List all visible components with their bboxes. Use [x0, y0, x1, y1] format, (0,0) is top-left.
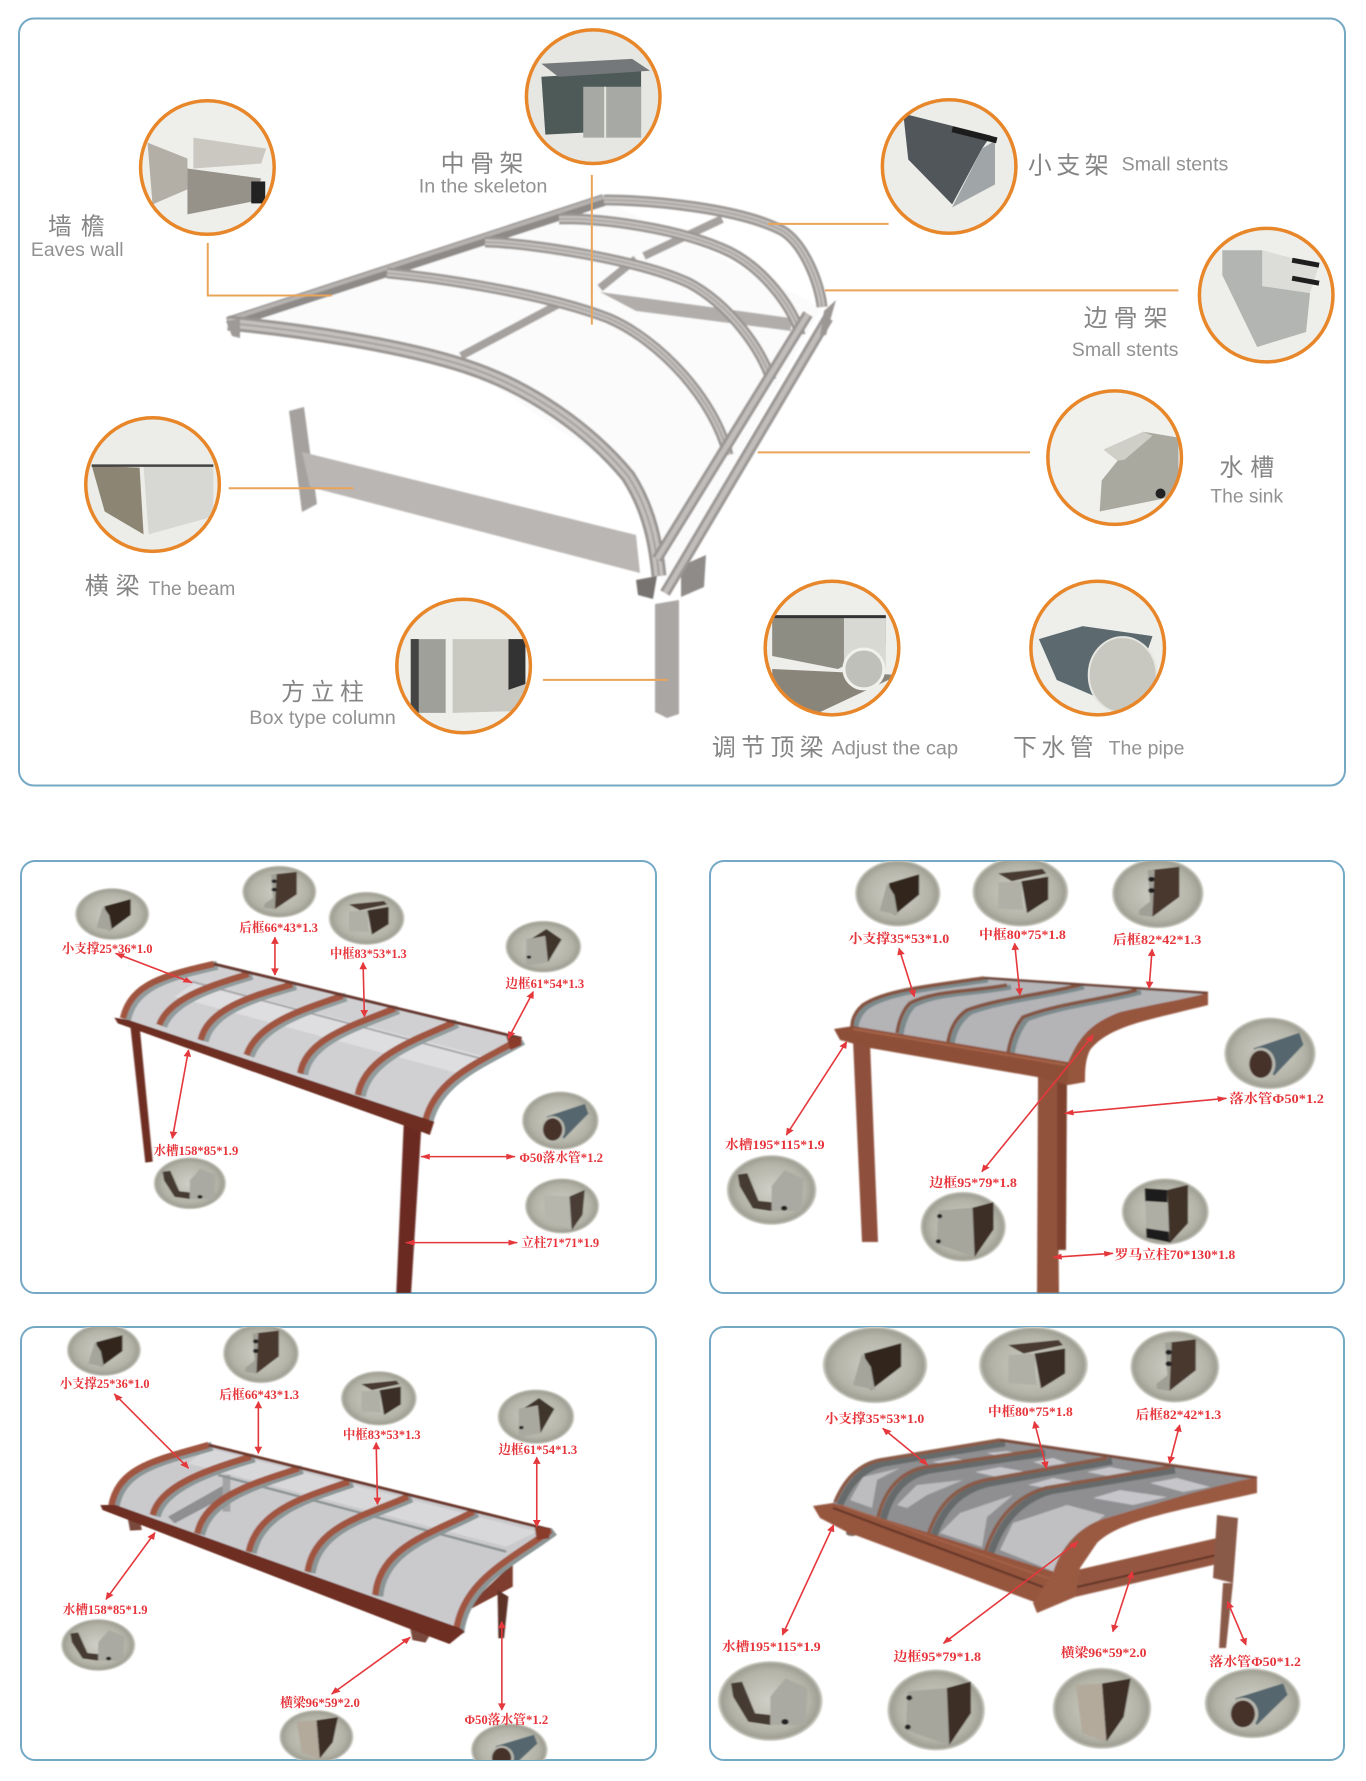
- dimension labels B: 后框82*42*1.3: [1113, 932, 1202, 947]
- label: beam: The beam: [149, 579, 235, 600]
- dimension labels A: 后框66*43*1.3: [239, 920, 318, 935]
- awning D: [813, 1440, 1257, 1648]
- label: adjust the cap: [712, 735, 958, 762]
- dimension labels D: 后框82*42*1.3: [1136, 1407, 1222, 1422]
- dimension labels D: 落水管Φ50*1.2: [1209, 1654, 1301, 1669]
- dimension labels D: 中框80*75*1.8: [988, 1404, 1073, 1419]
- label: side skeleton: [1072, 305, 1178, 361]
- dimension labels A: 水槽158*85*1.9: [154, 1143, 239, 1158]
- profile discs: [61, 1323, 574, 1777]
- label: adjust the cap: 调节顶梁: [712, 735, 824, 762]
- label: the pipe: 下水管: [1013, 735, 1094, 762]
- dimension labels D: 小支撑35*53*1.0: [825, 1411, 924, 1426]
- dimension labels C: 水槽158*85*1.9: [63, 1602, 148, 1617]
- icon: middle skeleton profile: [526, 30, 660, 164]
- callouts: profile photos and captions: [31, 30, 1333, 762]
- dimension labels B: 水槽195*115*1.9: [725, 1137, 825, 1152]
- awning A: [114, 964, 523, 1293]
- dimension labels A: 小支撑25*36*1.0: [62, 941, 153, 956]
- label: side skeleton: 边骨架: [1084, 305, 1167, 332]
- dimension labels C: Φ50落水管*1.2: [465, 1712, 548, 1727]
- dimension labels B: 中框80*75*1.8: [979, 927, 1066, 942]
- label: eaves wall: [31, 213, 124, 261]
- label: the pipe: The pipe: [1109, 739, 1184, 760]
- dimension labels C: 小支撑25*36*1.0: [60, 1376, 150, 1391]
- dimension labels A: 边框61*54*1.3: [505, 976, 585, 991]
- label: in the skeleton: [419, 150, 547, 197]
- label: sink: The sink: [1210, 486, 1284, 507]
- awning C: [100, 1445, 554, 1644]
- panel: awning with roman column, short: [710, 857, 1344, 1293]
- label: small stents: 小支架: [1028, 152, 1109, 179]
- label: box column: 方立柱: [281, 679, 364, 706]
- red arrows: [782, 1422, 1246, 1645]
- dimension labels C: 边框61*54*1.3: [498, 1442, 578, 1457]
- dimension labels C: 中框83*53*1.3: [343, 1427, 421, 1442]
- label: beam: [85, 573, 235, 600]
- dimension labels A: 立柱71*71*1.9: [521, 1235, 600, 1250]
- label: eaves wall: Eaves wall: [31, 240, 124, 261]
- profile discs: [727, 857, 1316, 1262]
- dimension labels D: 边框95*79*1.8: [893, 1649, 982, 1664]
- panel: cantilever awning, short: [710, 1327, 1344, 1760]
- label: small stents: Small stents: [1122, 154, 1228, 175]
- dimension labels A: [62, 920, 603, 1250]
- dimension labels D: 横梁96*59*2.0: [1061, 1645, 1147, 1660]
- label: in the skeleton: In the skeleton: [419, 176, 547, 197]
- icon: eaves wall profile: [141, 101, 274, 234]
- icon: small stent profile: [882, 100, 1016, 233]
- label: side skeleton: Small stents: [1072, 340, 1178, 361]
- label: beam: 横梁: [85, 573, 140, 600]
- dimension labels C: [60, 1376, 578, 1727]
- label: in the skeleton: 中骨架: [441, 150, 523, 177]
- dimension labels C: 横梁96*59*2.0: [280, 1695, 360, 1710]
- awning B: [834, 978, 1208, 1293]
- label: adjust the cap: Adjust the cap: [831, 739, 958, 760]
- red arrows: [106, 1394, 537, 1710]
- label: the pipe: [1013, 735, 1184, 762]
- dimension labels B: 落水管Φ50*1.2: [1229, 1091, 1324, 1106]
- panel: main frame diagram: [19, 18, 1345, 786]
- red arrows: [786, 943, 1226, 1257]
- dimension labels B: 小支撑35*53*1.0: [848, 931, 949, 946]
- profile discs: [718, 1327, 1301, 1751]
- icon: adjustable cap profile: [765, 581, 899, 716]
- dimension labels B: 罗马立柱70*130*1.8: [1115, 1247, 1236, 1262]
- leader lines: [208, 175, 1178, 680]
- label: sink: [1210, 455, 1284, 507]
- dimension labels B: [725, 927, 1324, 1262]
- icon: side skeleton profile: [1199, 228, 1333, 362]
- dimension labels D: [722, 1404, 1301, 1669]
- label: sink: 水槽: [1219, 455, 1274, 482]
- dimension labels A: Φ50落水管*1.2: [519, 1150, 603, 1165]
- dimension labels D: 水槽195*115*1.9: [722, 1639, 821, 1654]
- label: box column: Box type column: [249, 708, 396, 729]
- icon: box column profile: [397, 599, 530, 733]
- red arrows: [116, 937, 533, 1243]
- label: eaves wall: 墙檐: [48, 213, 105, 240]
- panel: awning with two posts, long: [21, 861, 656, 1293]
- aluminium frame structure: [226, 197, 836, 718]
- profile discs: [75, 866, 599, 1234]
- dimension labels C: 后框66*43*1.3: [219, 1387, 300, 1402]
- panel: cantilever awning, long: [21, 1323, 656, 1777]
- label: small stents: [1028, 152, 1228, 179]
- icon: sink profile: [1048, 391, 1181, 524]
- dimension labels B: 边框95*79*1.8: [929, 1175, 1017, 1190]
- dimension labels A: 中框83*53*1.3: [330, 946, 407, 961]
- icon: beam profile: [86, 418, 219, 551]
- icon: drain pipe profile: [1031, 581, 1164, 715]
- label: box column: [249, 679, 396, 729]
